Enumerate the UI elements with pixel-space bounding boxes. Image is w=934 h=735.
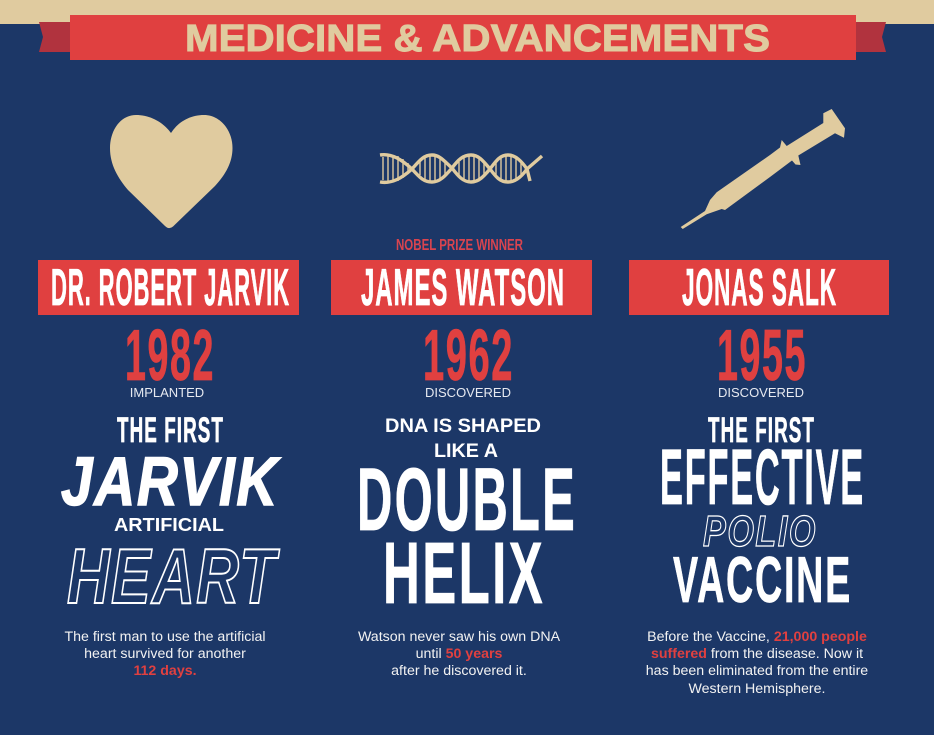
year 1982: 1982 xyxy=(125,316,215,396)
headline: the first Jarvik artificial heart: JARVIK xyxy=(61,443,281,520)
headline: the first Jarvik artificial heart: HEART xyxy=(67,532,280,620)
name bar: Dr. Robert Jarvik xyxy=(38,259,299,317)
headline: DNA is shaped like a double helix: DOUBLE xyxy=(357,449,577,549)
icon: DNA double helix xyxy=(380,155,542,182)
body text: Watson: until 50 years xyxy=(416,646,502,662)
headline: the first Jarvik artificial heart: THE FIRST xyxy=(117,411,224,450)
body text: Salk: suffered from the disease. Now it xyxy=(651,646,863,662)
headline: the first Jarvik artificial heart: ARTIFICIAL xyxy=(114,515,224,535)
name bar: James Watson xyxy=(331,259,592,317)
headline: the first effective polio vaccine: POLIO xyxy=(703,507,817,556)
headline: DNA is shaped like a double helix: LIKE A xyxy=(434,441,498,462)
title banner: MEDICINE & ADVANCEMENTS xyxy=(185,18,770,60)
label: discovered: DISCOVERED xyxy=(718,385,804,400)
icon: heart xyxy=(110,115,232,228)
body text: Salk: has been eliminated from the entire xyxy=(646,663,868,679)
label: implanted: IMPLANTED xyxy=(130,385,204,400)
icon: syringe xyxy=(681,109,845,229)
body text: Jarvik: The first man to use the artificial xyxy=(64,629,266,645)
body text: Watson: after he discovered it. xyxy=(391,663,527,679)
column: Salk xyxy=(629,259,889,697)
text: DR. ROBERT JARVIK xyxy=(51,259,290,317)
headline: the first effective polio vaccine: THE FIRST xyxy=(708,411,815,450)
column: Watson xyxy=(331,237,592,679)
headline: DNA is shaped like a double helix: DNA IS SHAPED xyxy=(385,416,541,437)
body text: Watson: Watson never saw his own DNA xyxy=(358,629,561,645)
body text: Salk: Before the Vaccine, 21,000 people xyxy=(647,629,867,645)
label: Nobel Prize winner: NOBEL PRIZE WINNER xyxy=(396,237,523,254)
label: discovered: DISCOVERED xyxy=(425,385,511,400)
headline: DNA is shaped like a double helix xyxy=(357,416,577,622)
body text: Jarvik: heart survived for another xyxy=(84,646,246,662)
name bar: James Watson: JAMES WATSON xyxy=(361,259,565,317)
name bar: Jonas Salk xyxy=(629,259,889,317)
year 1962: 1962 xyxy=(423,316,514,396)
headline: the first effective polio vaccine xyxy=(660,411,865,616)
headline: DNA is shaped like a double helix: HELIX xyxy=(383,525,545,622)
headline: the first Jarvik artificial heart xyxy=(61,411,281,620)
body text: Salk: Western Hemisphere. xyxy=(689,681,825,697)
column: Jarvik xyxy=(38,259,299,679)
title banner xyxy=(39,15,886,60)
body text: Jarvik: 112 days. xyxy=(133,663,197,679)
year 1955: 1955 xyxy=(717,316,807,396)
